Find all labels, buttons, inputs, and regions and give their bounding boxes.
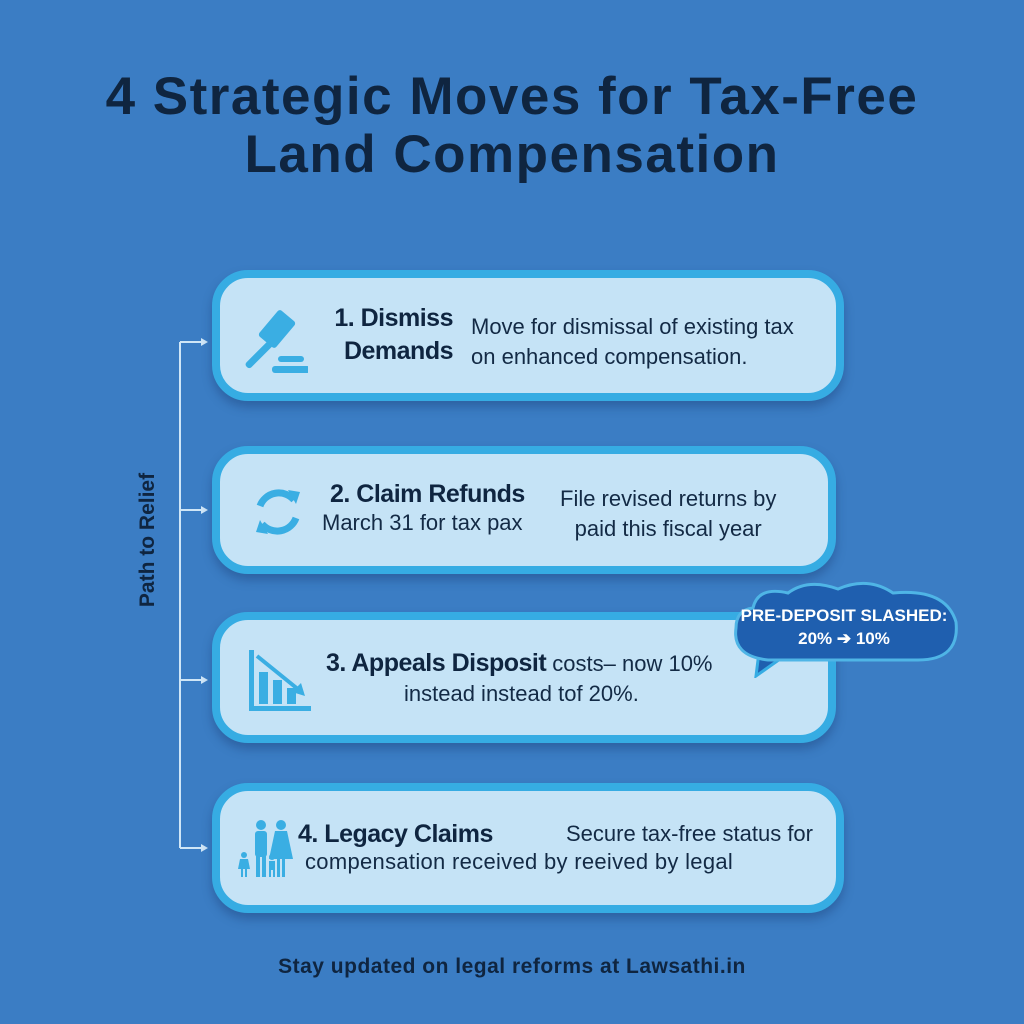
- description: paid this fiscal year: [575, 516, 762, 541]
- heading: 1. Dismiss: [334, 304, 453, 332]
- title: 4 Strategic Moves for Tax-Free: [106, 67, 918, 126]
- card 4: compensation received by reeived by legal: [305, 849, 733, 874]
- vertical label: Path to Relief: Path to Relief: [136, 473, 159, 607]
- bracket timeline: [179, 338, 208, 852]
- description: Secure tax-free status for: [566, 821, 813, 846]
- icon: chart down: [249, 650, 311, 711]
- heading: [334, 304, 453, 365]
- callout: pre-deposit slashed: PRE-DEPOSIT SLASHED:: [741, 606, 947, 625]
- title: Land Compensation: [245, 125, 779, 184]
- icon: gavel: [246, 310, 308, 373]
- description: [471, 314, 794, 369]
- icon: family: [238, 820, 293, 877]
- description: [560, 486, 776, 541]
- heading: Demands: [344, 337, 453, 365]
- description: File revised returns by: [560, 486, 776, 511]
- heading and description: instead instead tof 20%.: [404, 681, 639, 706]
- card 1: [212, 270, 844, 401]
- card 4: [212, 783, 844, 913]
- heading and description: 3. Appeals Disposit costs– now 10%: [326, 649, 712, 677]
- card 2: [212, 446, 836, 574]
- description: Move for dismissal of existing tax: [471, 314, 794, 339]
- card 2: March 31 for tax pax: [322, 510, 523, 535]
- card 3: [212, 612, 836, 743]
- callout: pre-deposit slashed: 20% ➔ 10%: [798, 629, 890, 648]
- icon: refresh: [256, 489, 300, 535]
- title: [106, 67, 918, 184]
- footer: Stay updated on legal reforms at Lawsathi.in: [278, 955, 746, 978]
- callout: pre-deposit slashed: [734, 582, 958, 678]
- heading and description: [326, 649, 712, 706]
- heading: 4. Legacy Claims: [298, 820, 493, 848]
- heading: 2. Claim Refunds: [330, 480, 525, 508]
- description: on enhanced compensation.: [471, 344, 747, 369]
